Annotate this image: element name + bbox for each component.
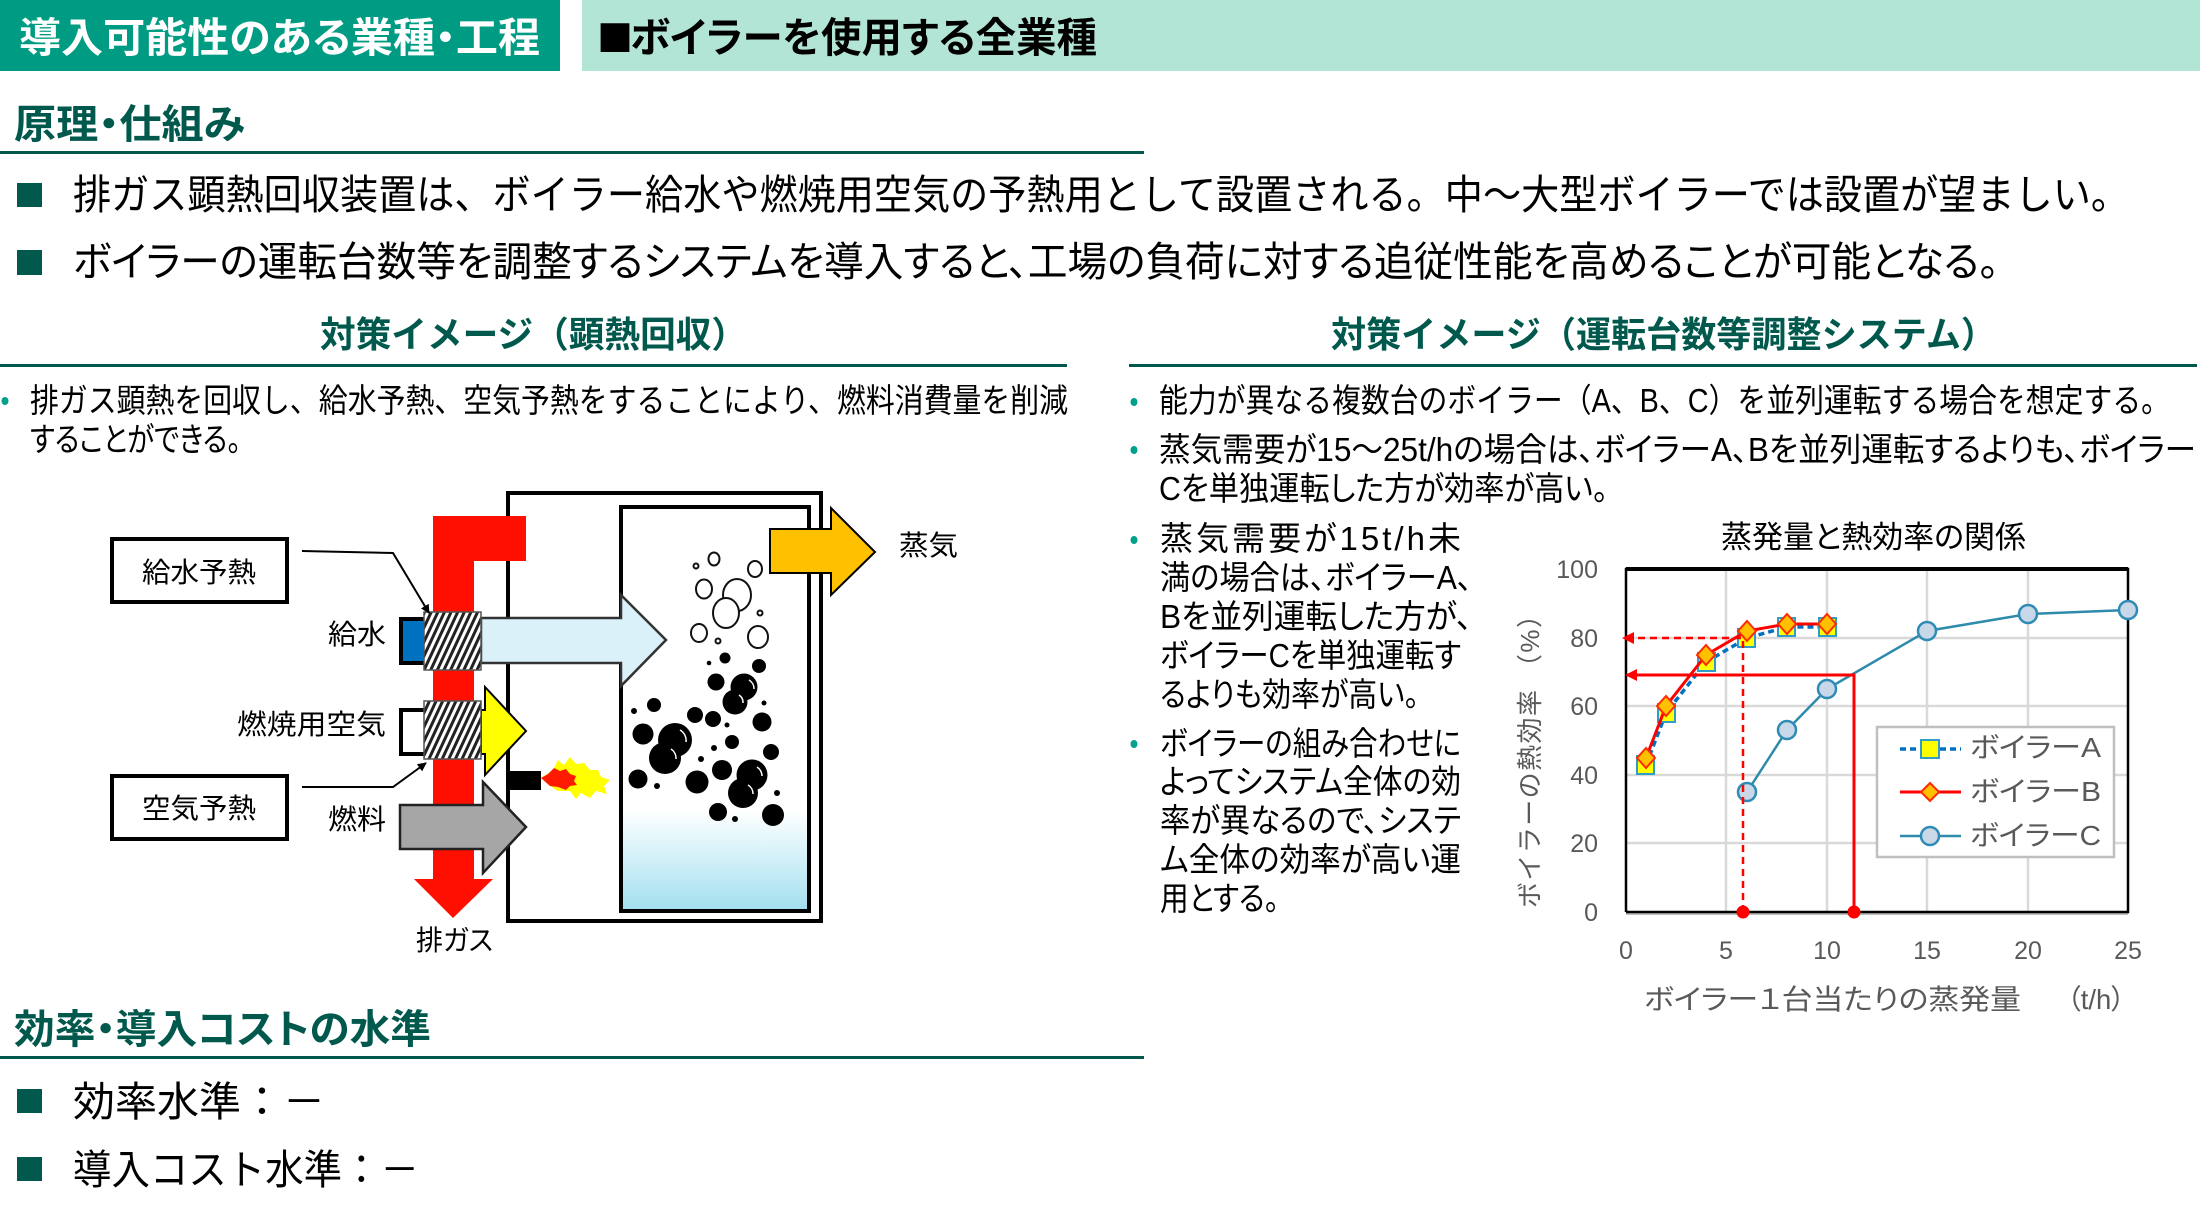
boiler drum with water bbox=[621, 507, 809, 911]
series: boiler A bbox=[1637, 618, 1836, 774]
x axis tick labels: 0 bbox=[1619, 937, 1633, 965]
text block: demand below 15 t/h: Bを並列運転した方が、 bbox=[1160, 598, 1472, 635]
heading: principle and mechanism: 原理・仕組み bbox=[14, 103, 245, 147]
series: boiler B bbox=[1637, 614, 1836, 768]
plot frame bbox=[1626, 569, 2128, 913]
red solid reading line at 69% bbox=[1625, 669, 1860, 918]
heading: principle and mechanism bbox=[0, 103, 1144, 154]
text block: operating scenario bbox=[1130, 382, 2196, 507]
text block: boiler combination: 用とする。 bbox=[1160, 880, 1279, 917]
label: steam: 蒸気 bbox=[899, 530, 958, 561]
legend bbox=[1877, 727, 2114, 857]
text block: demand below 15 t/h: 満の場合は、ボイラーA、 bbox=[1160, 559, 1472, 596]
arrow: fuel bbox=[400, 782, 526, 873]
heading: measure image, unit count adjustment system: 対策イメージ（運転台数等調整システム） bbox=[1331, 314, 1996, 355]
y axis tick labels: 0 bbox=[1584, 899, 1598, 927]
legend: ボイラーC bbox=[1970, 820, 2101, 851]
label box: feed water preheating: 給水予熱 bbox=[142, 557, 256, 588]
text block: demand below 15 t/h bbox=[1130, 520, 1472, 713]
text block: demand below 15 t/h: ボイラーCを単独運転す bbox=[1160, 637, 1461, 674]
line chart: steam output vs thermal efficiency bbox=[1515, 520, 2142, 1015]
text block: efficiency and cost bullets: 効率水準：－ bbox=[73, 1079, 325, 1125]
red dashed reading line at 80% bbox=[1622, 632, 1750, 918]
x axis title: ボイラー１台当たりの蒸発量 bbox=[1644, 984, 2021, 1015]
text block: sensible heat recovery description: することができる。 bbox=[30, 421, 241, 458]
text block: principle bullets: ボイラーの運転台数等を調整するシステムを導入すると、工場の負荷に対する追従性能を高めることが可能となる。 bbox=[73, 239, 1999, 285]
label: combustion air: 燃焼用空気 bbox=[237, 709, 386, 740]
arrow: feed water bbox=[481, 595, 666, 686]
text block: sensible heat recovery description bbox=[2, 382, 1068, 458]
boiler outer casing bbox=[508, 493, 821, 921]
text block: demand below 15 t/h: るよりも効率が高い。 bbox=[1160, 676, 1419, 713]
text block: boiler combination: 率が異なるので、システ bbox=[1160, 802, 1461, 839]
legend: ボイラーB bbox=[1970, 776, 2101, 807]
text block: boiler combination bbox=[1130, 725, 1461, 917]
label: fuel: 燃料 bbox=[328, 804, 386, 835]
text block: efficiency and cost bullets bbox=[17, 1079, 419, 1193]
y axis tick labels: 80 bbox=[1570, 625, 1598, 653]
y axis tick labels bbox=[1556, 556, 1598, 927]
x axis tick labels: 10 bbox=[1813, 937, 1841, 965]
text block: efficiency and cost bullets: 導入コスト水準：－ bbox=[73, 1147, 419, 1193]
text block: principle bullets bbox=[17, 172, 2129, 285]
heading: efficiency and cost level: 効率・導入コストの水準 bbox=[14, 1008, 431, 1052]
text block: demand below 15 t/h: 蒸気需要が15t/h未 bbox=[1160, 520, 1461, 557]
series: boiler C bbox=[1738, 601, 2137, 801]
heading: efficiency and cost level bbox=[0, 1008, 1144, 1059]
y axis tick labels: 100 bbox=[1556, 556, 1598, 584]
x axis tick labels: 15 bbox=[1913, 937, 1941, 965]
text block: boiler combination: ム全体の効率が高い運 bbox=[1160, 841, 1461, 878]
hatched heat exchanger: feed water preheater bbox=[424, 612, 481, 670]
bubbles: boiling bbox=[628, 652, 784, 826]
text block: sensible heat recovery description: 排ガス顕熱を回収し、給水予熱、空気予熱をすることにより、燃料消費量を削減 bbox=[30, 382, 1068, 419]
bubbles: steam bbox=[691, 552, 768, 648]
arrow: steam bbox=[770, 508, 875, 595]
x axis tick labels: 25 bbox=[2114, 937, 2142, 965]
burner bbox=[506, 771, 541, 790]
y axis tick labels: 40 bbox=[1570, 762, 1598, 790]
hatched heat exchanger: air preheater bbox=[424, 701, 481, 759]
diagram: boiler with exhaust heat recovery bbox=[112, 493, 958, 956]
y axis tick labels: 60 bbox=[1570, 693, 1598, 721]
text block: boiler combination: よってシステム全体の効 bbox=[1160, 763, 1461, 800]
y axis title: ボイラーの熱効率 （%） bbox=[1515, 602, 1545, 908]
header: applicable industries bbox=[582, 0, 2200, 71]
combustion air inlet bbox=[401, 710, 427, 754]
arrow: combustion air bbox=[481, 687, 526, 775]
label box: air preheating bbox=[112, 776, 287, 839]
exhaust gas pipe bbox=[414, 516, 526, 918]
icon: flame bbox=[541, 757, 610, 799]
heading: measure image, sensible heat recovery bbox=[0, 314, 1067, 367]
header: applicable industries: ■ bbox=[597, 10, 633, 62]
heading: measure image, sensible heat recovery: 対策イメージ（顕熱回収） bbox=[320, 314, 747, 355]
label box: air preheating: 空気予熱 bbox=[142, 793, 256, 824]
heading: measure image, unit count adjustment system bbox=[1129, 314, 2197, 367]
text block: operating scenario: Cを単独運転した方が効率が高い。 bbox=[1159, 470, 1608, 507]
label: exhaust gas: 排ガス bbox=[416, 925, 493, 956]
header: category label bbox=[0, 0, 560, 71]
arrow: air preheater leader bbox=[302, 763, 426, 787]
x axis title: （t/h） bbox=[2067, 984, 2125, 1015]
arrow: feed water preheater leader bbox=[302, 551, 429, 613]
legend: ボイラーA bbox=[1970, 732, 2101, 763]
x axis tick labels bbox=[1619, 937, 2142, 965]
label box: feed water preheating bbox=[112, 539, 287, 602]
header: applicable industries: ボイラーを使用する全業種 bbox=[630, 15, 1097, 61]
label: feed water: 給水 bbox=[328, 619, 386, 650]
x axis tick labels: 5 bbox=[1719, 937, 1733, 965]
feed water inlet bbox=[401, 619, 427, 663]
y axis tick labels: 20 bbox=[1570, 830, 1598, 858]
x axis tick labels: 20 bbox=[2014, 937, 2042, 965]
text block: boiler combination: ボイラーの組み合わせに bbox=[1160, 725, 1461, 762]
chart title: 蒸発量と熱効率の関係 bbox=[1721, 520, 2026, 555]
header: category label: 導入可能性のある業種・工程 bbox=[19, 15, 540, 61]
